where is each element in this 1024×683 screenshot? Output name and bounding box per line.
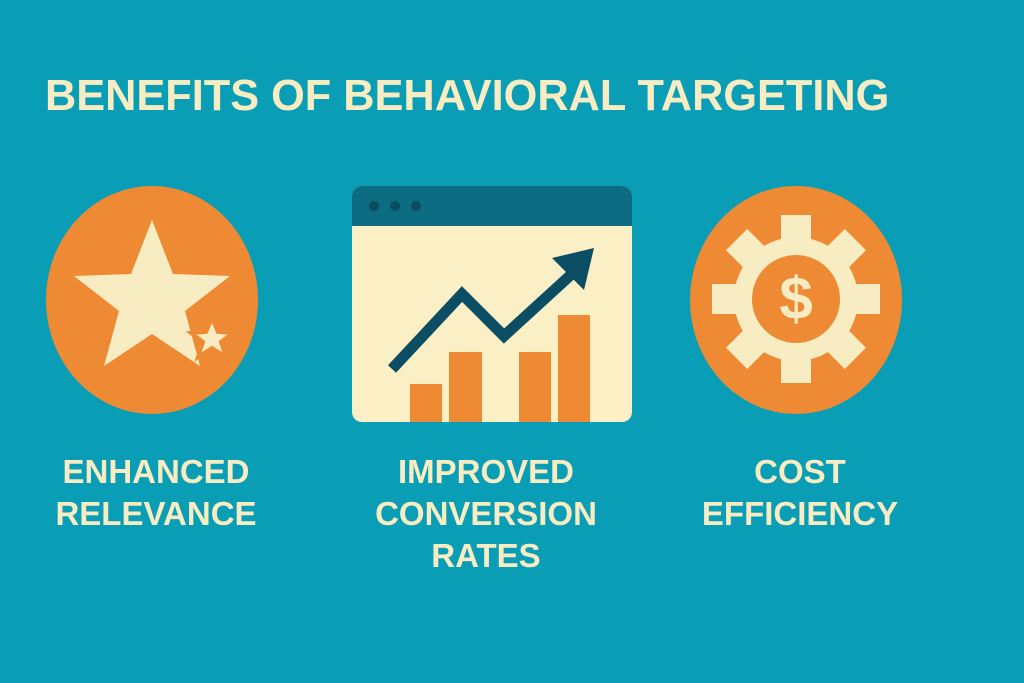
label: cost efficiency: EFFICIENCY	[702, 495, 898, 532]
title: BENEFITS OF BEHAVIORAL TARGETING	[45, 72, 889, 120]
label: improved conversion rates	[375, 453, 597, 574]
icon: gear dollar circle: $	[779, 265, 813, 332]
label: cost efficiency: COST	[754, 453, 846, 490]
icon: gear dollar circle	[690, 186, 902, 414]
label: enhanced relevance: RELEVANCE	[55, 495, 257, 532]
label: improved conversion rates: IMPROVED	[398, 453, 574, 490]
label: improved conversion rates: CONVERSION	[375, 495, 597, 532]
label: cost efficiency	[702, 453, 898, 532]
icon: browser chart	[352, 186, 632, 422]
label: enhanced relevance: ENHANCED	[62, 453, 250, 490]
label: enhanced relevance	[55, 453, 257, 532]
icon: star circle	[46, 186, 258, 414]
label: improved conversion rates: RATES	[431, 537, 541, 574]
